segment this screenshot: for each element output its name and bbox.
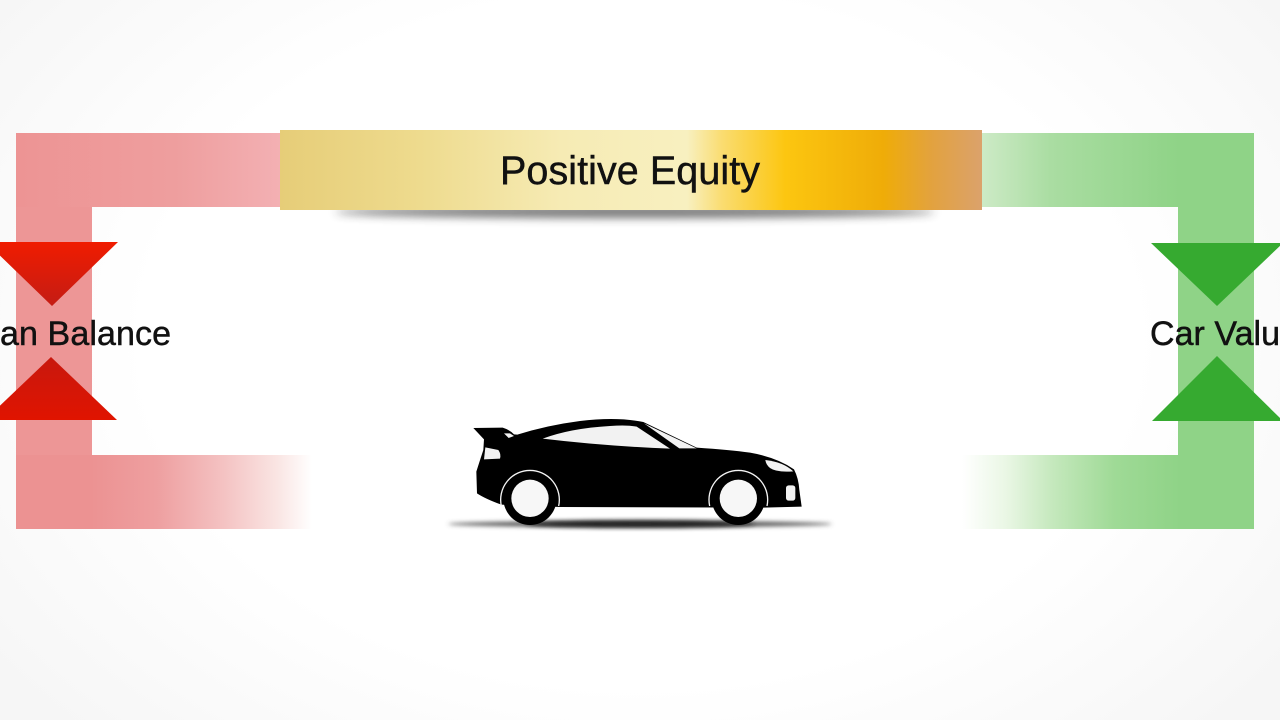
car spoiler gap [504,433,514,438]
icon: red up triangle [0,357,117,420]
panel: loan balance bracket [16,133,312,529]
heading: positive equity: Positive Equity [500,149,760,193]
icon: green down triangle [1151,243,1280,306]
car headlight [765,460,793,472]
car windscreen [644,423,697,448]
car fog light [786,485,795,501]
banner: positive equity [280,130,982,210]
banner shadow [335,206,935,218]
icon: red down triangle [0,242,118,306]
car tail light [484,447,500,459]
icon: green up triangle [1152,356,1280,421]
car shadow [448,520,832,528]
rear wheel [501,470,559,525]
icon: black sports car [473,419,802,525]
car side window [543,425,670,449]
front wheel [709,470,768,525]
panel: car value bracket [962,133,1254,529]
